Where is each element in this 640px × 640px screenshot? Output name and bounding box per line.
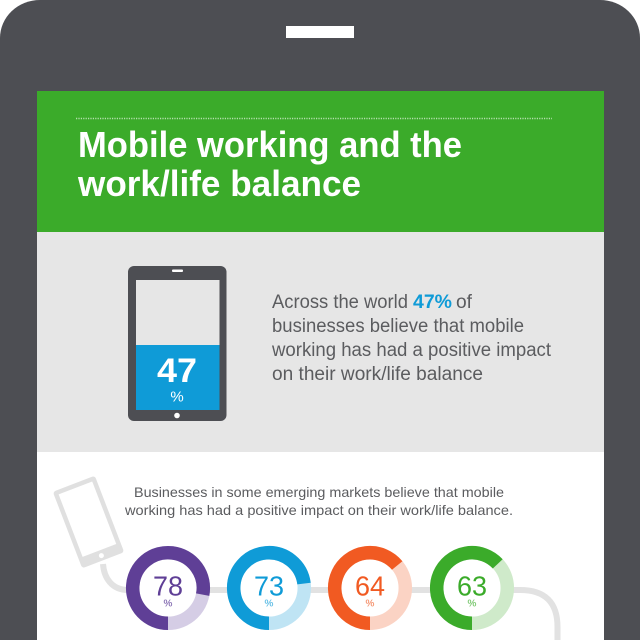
statistic text: businesses believe that mobile <box>272 316 524 337</box>
title: Mobile working and the <box>78 124 462 165</box>
panel: green title header <box>37 91 604 232</box>
icon: tablet showing 47 percent: % <box>170 388 184 406</box>
icon: tablet showing 47 percent: 47 <box>157 352 197 390</box>
donut: 63 percent: 63 <box>457 570 487 602</box>
icon: tablet showing 47 percent <box>128 266 226 421</box>
statistic text: 47% <box>413 292 452 313</box>
connector line <box>103 564 558 640</box>
title: work/life balance <box>77 163 361 204</box>
title <box>77 124 462 204</box>
donut: 63 percent <box>437 553 507 623</box>
donut: 78 percent: % <box>164 598 173 610</box>
donut: 73 percent: 73 <box>254 570 284 602</box>
donut: 63 percent: % <box>468 598 477 610</box>
donut: 64 percent: % <box>366 598 375 610</box>
donut: 73 percent: % <box>265 598 274 610</box>
emerging markets text: Businesses in some emerging markets believe that mobile <box>134 484 504 500</box>
donut: 64 percent: 64 <box>355 570 385 602</box>
donut: 78 percent <box>133 553 203 623</box>
statistic text: Across the world <box>272 292 408 313</box>
emerging markets text <box>124 484 513 518</box>
donut: 64 percent <box>335 553 405 623</box>
donut: 78 percent: 78 <box>153 570 183 602</box>
panel: emerging markets <box>53 476 557 640</box>
donut: 73 percent <box>234 553 304 623</box>
statistic text <box>271 292 552 385</box>
statistic text: working has had a positive impact <box>271 340 552 361</box>
emerging markets text: working has had a positive impact on their work/life balance. <box>124 502 513 518</box>
icon: tilted phone <box>53 476 124 568</box>
statistic text: on their work/life balance <box>272 364 483 385</box>
statistic text: of <box>456 292 473 313</box>
panel: global statistic <box>37 232 604 452</box>
